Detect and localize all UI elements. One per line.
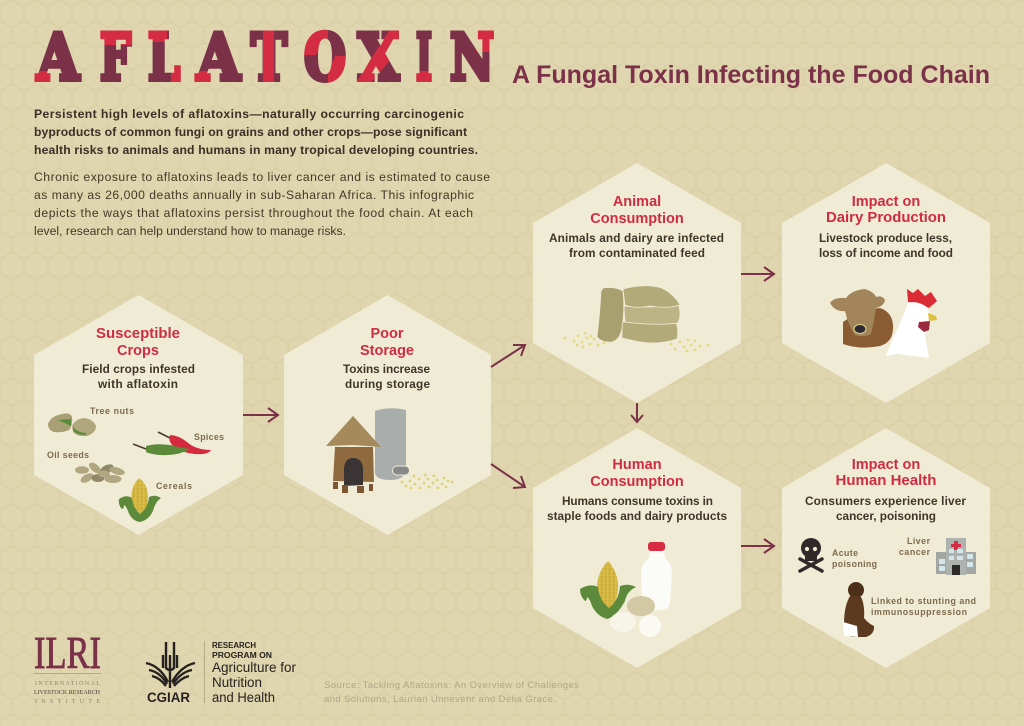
heading: animal consumption: Animal <box>613 194 661 210</box>
description: susceptible crops <box>82 362 195 391</box>
icon: spilled feed <box>564 332 709 352</box>
title: T <box>251 20 287 96</box>
icon: feed sacks <box>597 286 680 343</box>
icon: corn <box>119 478 161 522</box>
icon: food items <box>610 596 661 637</box>
heading: poor storage: Storage <box>360 343 414 359</box>
description: human consumption: staple foods and dairy products <box>547 509 727 523</box>
title: A <box>196 20 241 96</box>
arrow: animal consumption to dairy production <box>741 267 774 281</box>
logo: ILRI: ILRI <box>34 627 101 678</box>
logo: CGIAR <box>146 642 195 705</box>
source note <box>324 680 579 705</box>
description: susceptible crops: with aflatoxin <box>97 377 178 391</box>
label: oil seeds: Oil seeds <box>47 450 89 460</box>
heading: animal consumption <box>590 194 684 227</box>
intro text: regular paragraph: depicts the ways that aflatoxins persist throughout the food chain. At each <box>34 206 473 220</box>
title: O <box>304 20 346 96</box>
panel: human consumption <box>533 428 741 668</box>
icon: skull and crossbones <box>800 538 822 571</box>
title: I <box>416 20 432 96</box>
arrow: storage to human consumption <box>491 464 525 488</box>
icon: spilled grain <box>401 474 453 489</box>
heading: animal consumption: Consumption <box>590 211 684 227</box>
icon: corn <box>580 561 636 619</box>
heading: human consumption <box>590 457 684 490</box>
label: liver cancer: cancer <box>899 547 931 557</box>
logo: research program: and Health <box>212 689 275 705</box>
label: liver cancer <box>899 536 931 557</box>
icon: spices <box>133 432 211 455</box>
description: impact on dairy production <box>819 231 953 260</box>
heading: impact on dairy production: Dairy Production <box>826 210 946 226</box>
title: L <box>148 20 180 96</box>
label: cereals: Cereals <box>156 481 192 491</box>
icon: hut <box>326 416 381 493</box>
description: poor storage <box>343 362 430 391</box>
logo: ILRI: INTERNATIONAL <box>35 681 100 687</box>
title: X <box>358 20 399 96</box>
title: A <box>36 20 80 96</box>
intro text: regular paragraph: Chronic exposure to aflatoxins leads to liver cancer and is estimated to cause <box>34 170 490 184</box>
arrow: human consumption to human health <box>741 539 774 553</box>
label: stunting and immunosuppression: immunosuppression <box>871 607 967 617</box>
label: spices: Spices <box>194 432 224 442</box>
logo: research program: PROGRAM ON <box>212 651 272 660</box>
heading: impact on human health <box>836 457 936 489</box>
intro text: regular paragraph: level, research can help understand how to manage risks. <box>34 224 346 238</box>
icon: grain silo <box>375 408 410 480</box>
description: impact on human health: cancer, poisoning <box>836 509 936 523</box>
label: acute poisoning <box>832 548 877 569</box>
icon: oil seeds <box>75 461 126 485</box>
description: impact on human health: Consumers experience liver <box>805 494 966 508</box>
description: poor storage: Toxins increase <box>343 362 430 376</box>
logo: CGIAR: CGIAR <box>147 690 190 705</box>
icon: chicken <box>886 289 937 358</box>
heading: impact on dairy production: Impact on <box>852 194 920 210</box>
icon: baby <box>843 582 874 637</box>
intro text: regular paragraph: as many as 26,000 deaths annually in sub-Saharan Africa. This infographic <box>34 188 474 202</box>
description: human consumption <box>547 494 727 523</box>
heading: impact on human health: Impact on <box>852 457 920 473</box>
intro text: regular paragraph <box>34 170 490 238</box>
description: impact on dairy production: Livestock produce less, <box>819 231 952 245</box>
logo: research program <box>204 641 296 705</box>
arrow: crops to storage <box>243 408 278 422</box>
logo: research program: Agriculture for <box>212 659 296 675</box>
logo: research program: RESEARCH <box>212 641 256 650</box>
icon: cow <box>830 289 893 348</box>
intro text: bold paragraph: byproducts of common fungi on grains and other crops—pose significant <box>34 125 467 139</box>
panel: impact on human health <box>782 428 990 668</box>
description: animal consumption: from contaminated feed <box>569 246 705 260</box>
logo: ILRI: INSTITUTE <box>35 699 100 705</box>
heading: susceptible crops: Crops <box>117 343 159 359</box>
subtitle: A Fungal Toxin Infecting the Food Chain <box>512 61 990 89</box>
label: stunting and immunosuppression <box>871 596 976 617</box>
panel: susceptible crops <box>34 295 243 535</box>
panel: impact on dairy production <box>782 163 990 403</box>
icon: tree nuts <box>48 413 96 436</box>
source note: Source: Tackling Aflatoxins: An Overview of Challenges <box>324 680 579 691</box>
title <box>36 20 494 96</box>
heading: human consumption: Human <box>612 457 662 473</box>
heading: impact on human health: Human Health <box>836 473 936 489</box>
heading: poor storage <box>360 326 414 359</box>
logo: ILRI <box>34 627 101 705</box>
logo: research program: Nutrition <box>212 674 262 690</box>
description: animal consumption <box>549 231 724 260</box>
heading: susceptible crops: Susceptible <box>96 326 180 342</box>
label: acute poisoning: poisoning <box>832 559 877 569</box>
label: stunting and immunosuppression: Linked to stunting and <box>871 596 976 606</box>
description: human consumption: Humans consume toxins in <box>562 494 713 508</box>
description: impact on dairy production: loss of income and food <box>819 246 953 260</box>
intro text: bold paragraph: health risks to animals and humans in many tropical developing countries. <box>34 143 478 157</box>
description: impact on human health <box>805 494 966 523</box>
icon: milk bottle <box>641 542 672 610</box>
label: tree nuts: Tree nuts <box>90 406 134 416</box>
description: poor storage: during storage <box>345 377 430 391</box>
label: liver cancer: Liver <box>907 536 931 546</box>
heading: human consumption: Consumption <box>590 474 684 490</box>
arrow: animal consumption to human consumption <box>631 403 643 422</box>
description: susceptible crops: Field crops infested <box>82 362 195 376</box>
description: animal consumption: Animals and dairy are infected <box>549 231 724 245</box>
label: acute poisoning: Acute <box>832 548 858 558</box>
logo: ILRI: LIVESTOCK RESEARCH <box>34 689 100 696</box>
title: F <box>100 20 131 96</box>
heading: impact on dairy production <box>826 194 946 226</box>
title: N <box>450 20 494 96</box>
arrow: storage to animal consumption <box>491 345 525 367</box>
heading: susceptible crops <box>96 326 180 359</box>
icon: hospital <box>936 538 976 575</box>
intro text: bold paragraph: Persistent high levels of aflatoxins—naturally occurring carcinogenic <box>34 107 464 121</box>
panel: animal consumption <box>533 163 741 403</box>
source note: and Solutions, Laurian Unnevehr and Delia Grace. <box>324 694 556 705</box>
heading: poor storage: Poor <box>370 326 404 342</box>
intro text: bold paragraph <box>34 107 478 157</box>
panel: poor storage <box>284 295 491 535</box>
